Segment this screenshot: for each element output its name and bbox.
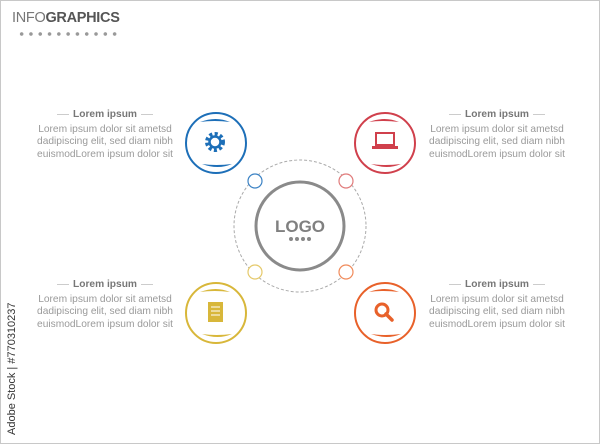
text block: top left: euismodLorem ipsum dolor sit (37, 149, 173, 160)
text block: top right (429, 109, 565, 160)
small connector circles (248, 174, 353, 279)
title: INFOGRAPHICS (12, 10, 120, 26)
text block: bottom right: euismodLorem ipsum dolor sit (429, 319, 565, 330)
icon circle: search (orange) (355, 283, 415, 343)
center logo circle: LOGO (275, 217, 325, 236)
icon circle: laptop (red) (355, 113, 415, 173)
text block: bottom left (37, 279, 173, 330)
icon circle: document (yellow) (186, 283, 246, 343)
text block: top left: dadipiscing elit, sed diam nibh (37, 136, 173, 147)
text block: bottom right (429, 279, 565, 330)
text block: top right: Lorem ipsum dolor sit ametsd (430, 124, 564, 135)
watermark id: Adobe Stock | #770310237 (6, 302, 18, 435)
center logo circle (256, 182, 344, 270)
text block: bottom left: euismodLorem ipsum dolor sit (37, 319, 173, 330)
text block: bottom left: Lorem ipsum (73, 279, 137, 290)
text block: bottom right: Lorem ipsum dolor sit ametsd (430, 294, 564, 305)
text block: bottom right: dadipiscing elit, sed diam nibh (429, 306, 565, 317)
text block: top left: Lorem ipsum dolor sit ametsd (38, 124, 172, 135)
text block: bottom left: Lorem ipsum dolor sit ametsd (38, 294, 172, 305)
dashed orbit (234, 160, 366, 292)
text block: top right: euismodLorem ipsum dolor sit (429, 149, 565, 160)
text block: top right: Lorem ipsum (465, 109, 529, 120)
icon circle: gear (blue) (186, 113, 246, 173)
text block: top right: dadipiscing elit, sed diam nibh (429, 136, 565, 147)
text block: bottom left: dadipiscing elit, sed diam nibh (37, 306, 173, 317)
text block: bottom right: Lorem ipsum (465, 279, 529, 290)
text block: top left (37, 109, 173, 160)
text block: top left: Lorem ipsum (73, 109, 137, 120)
title dots (17, 31, 117, 37)
